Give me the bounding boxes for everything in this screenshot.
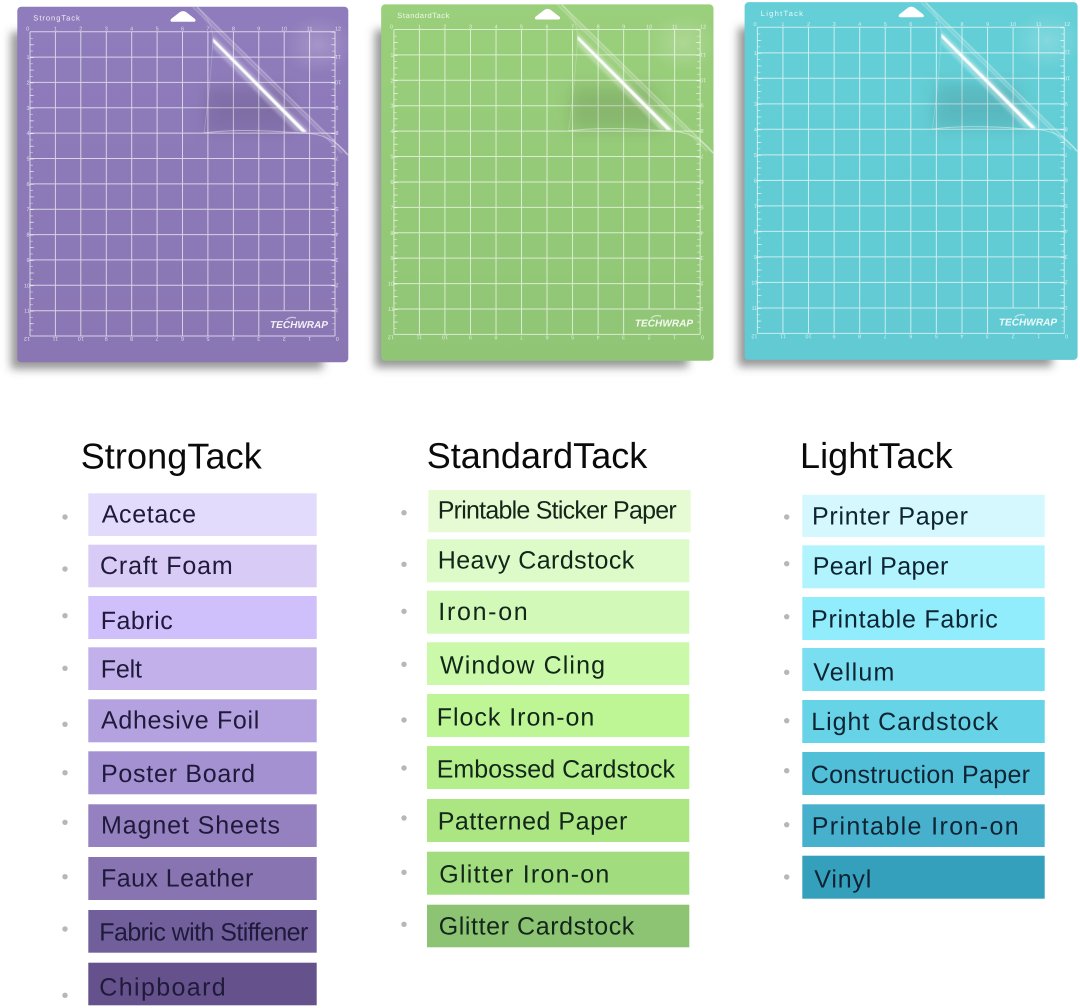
ruler numbers: 123456789 bbox=[1065, 100, 1068, 310]
peeled protective film bbox=[558, 5, 719, 153]
mat board bbox=[381, 4, 713, 361]
panel: StrongTack materials bbox=[62, 435, 317, 1005]
panel: LightTack materials bbox=[784, 435, 1045, 899]
item: Pearl Paper: Pearl Paper bbox=[813, 553, 948, 581]
ruler numbers: 0123456789 bbox=[26, 26, 260, 32]
ruler numbers: 11 bbox=[335, 53, 341, 59]
item: Chipboard bbox=[62, 963, 317, 1005]
item: Chipboard: Chipboard bbox=[99, 974, 226, 1002]
ruler numbers: 10 bbox=[1064, 74, 1070, 80]
item: Heavy Cardstock: Heavy Cardstock bbox=[438, 547, 635, 575]
peeled protective film bbox=[193, 7, 354, 155]
mat shadow bbox=[375, 30, 688, 367]
item: Magnet Sheets bbox=[62, 804, 317, 847]
mat board bbox=[17, 7, 348, 362]
item: Printable Fabric bbox=[784, 597, 1045, 640]
icon: hanging hole bbox=[535, 9, 560, 19]
ruler numbers: 123456789 bbox=[754, 51, 757, 261]
ruler numbers: 11 bbox=[388, 307, 394, 313]
item: Embossed Cardstock: Embossed Cardstock bbox=[437, 755, 676, 783]
icon: hanging hole bbox=[899, 7, 924, 17]
mat label: LightTack bbox=[761, 9, 803, 18]
ruler numbers: 10 bbox=[646, 24, 652, 30]
item: Patterned Paper bbox=[401, 799, 689, 842]
ruler numbers: 10 bbox=[805, 333, 812, 339]
item: Adhesive Foil bbox=[62, 699, 317, 742]
ruler numbers: 11 bbox=[1064, 49, 1070, 55]
ruler numbers: 11 bbox=[700, 51, 706, 57]
ruler numbers: 12 bbox=[1064, 22, 1070, 28]
item: Glitter Cardstock: Glitter Cardstock bbox=[439, 912, 635, 940]
item: Iron-on bbox=[401, 591, 689, 634]
item: Adhesive Foil: Adhesive Foil bbox=[101, 707, 259, 735]
ruler numbers: 10 bbox=[388, 282, 394, 288]
item: Vellum: Vellum bbox=[813, 659, 894, 687]
ruler numbers: 12 bbox=[335, 26, 341, 32]
item: Printable Fabric: Printable Fabric bbox=[811, 605, 998, 633]
mat shadow bbox=[11, 32, 323, 369]
ruler numbers: 11 bbox=[780, 333, 786, 339]
logo: TECHWRAP bbox=[999, 317, 1057, 328]
logo: TECHWRAP bbox=[635, 318, 693, 329]
ruler numbers: 10 bbox=[442, 334, 448, 340]
item: Craft Foam bbox=[62, 545, 317, 587]
item: Iron-on: Iron-on bbox=[438, 598, 528, 626]
item: Patterned Paper: Patterned Paper bbox=[438, 807, 627, 835]
item: Window Cling bbox=[401, 642, 689, 685]
ruler numbers: 123456789 bbox=[390, 53, 393, 262]
item: Magnet Sheets: Magnet Sheets bbox=[101, 811, 280, 839]
ruler numbers: 11 bbox=[417, 334, 422, 340]
ruler numbers: 10 bbox=[78, 335, 84, 341]
item: Embossed Cardstock bbox=[401, 746, 689, 789]
mat label: StandardTack bbox=[397, 11, 450, 20]
ruler numbers: 10 bbox=[24, 283, 30, 289]
item: Glitter Iron-on bbox=[401, 852, 689, 895]
item: Heavy Cardstock bbox=[401, 539, 689, 582]
peeled protective film bbox=[921, 2, 1080, 151]
panel: StrongTack mat bbox=[11, 7, 354, 369]
heading: LightTack: LightTack bbox=[800, 435, 954, 476]
item: Printable Sticker Paper bbox=[401, 490, 691, 532]
ruler numbers: 12 bbox=[751, 333, 757, 339]
item: Printable Sticker Paper: Printable Sticker Paper bbox=[438, 496, 677, 524]
ruler numbers: 10 bbox=[751, 280, 757, 286]
item: Window Cling: Window Cling bbox=[440, 651, 605, 679]
item: Fabric with Stiffener bbox=[62, 910, 317, 953]
item: Vellum bbox=[784, 648, 1045, 691]
item: Printable Iron-on: Printable Iron-on bbox=[812, 812, 1019, 840]
logo: TECHWRAP bbox=[270, 320, 328, 331]
ruler numbers: 123456789 bbox=[701, 102, 704, 311]
ruler numbers: 0123456789 bbox=[832, 333, 1068, 339]
mat label: StrongTack bbox=[33, 14, 80, 22]
ruler numbers: 12 bbox=[24, 335, 30, 341]
ruler numbers: 123456789 bbox=[26, 55, 30, 264]
mat board bbox=[745, 2, 1078, 360]
ruler numbers: 10 bbox=[1010, 22, 1016, 28]
item: Faux Leather bbox=[62, 857, 317, 900]
ruler numbers bbox=[24, 26, 341, 341]
ruler numbers: 11 bbox=[53, 335, 58, 341]
item: Printer Paper bbox=[784, 495, 1045, 537]
item: Vinyl bbox=[784, 856, 1045, 899]
item: Faux Leather: Faux Leather bbox=[101, 865, 253, 893]
heading: StandardTack: StandardTack bbox=[427, 435, 648, 476]
ruler numbers: 0123456789 bbox=[469, 334, 704, 340]
cutting grid bbox=[394, 29, 700, 334]
item: Flock Iron-on: Flock Iron-on bbox=[437, 704, 594, 732]
item: Vinyl: Vinyl bbox=[814, 866, 871, 894]
ruler numbers: 123456789 bbox=[335, 104, 339, 313]
ruler numbers: 12 bbox=[700, 24, 706, 30]
item: Felt: Felt bbox=[101, 655, 142, 683]
ruler numbers bbox=[388, 24, 706, 340]
item: Glitter Iron-on: Glitter Iron-on bbox=[439, 860, 609, 888]
item: Light Cardstock: Light Cardstock bbox=[811, 708, 999, 736]
item: Fabric: Fabric bbox=[101, 607, 173, 635]
item: Printer Paper: Printer Paper bbox=[812, 502, 968, 530]
ruler numbers bbox=[751, 22, 1070, 339]
ruler numbers: 11 bbox=[751, 306, 757, 312]
item: Printable Iron-on bbox=[784, 804, 1045, 847]
item: Poster Board bbox=[62, 751, 317, 794]
item: Fabric bbox=[62, 596, 317, 639]
ruler numbers: 10 bbox=[281, 26, 287, 32]
ruler numbers: 10 bbox=[700, 76, 706, 82]
ruler numbers: 0123456789 bbox=[105, 335, 339, 341]
icon: hanging hole bbox=[170, 11, 196, 22]
item: Acetace: Acetace bbox=[102, 501, 196, 529]
item: Flock Iron-on bbox=[401, 694, 689, 737]
mat shadow bbox=[738, 28, 1052, 367]
item: Construction Paper bbox=[784, 752, 1045, 795]
panel: LightTack mat bbox=[738, 2, 1080, 367]
heading: StrongTack: StrongTack bbox=[81, 435, 263, 476]
item: Fabric with Stiffener: Fabric with Stiffener bbox=[99, 919, 308, 947]
item: Construction Paper: Construction Paper bbox=[811, 761, 1030, 789]
item: Felt bbox=[62, 647, 317, 690]
cutting grid bbox=[757, 27, 1064, 333]
ruler numbers: 10 bbox=[335, 78, 341, 84]
ruler numbers: 0123456789 bbox=[390, 24, 625, 30]
ruler numbers: 11 bbox=[672, 24, 678, 30]
item: Light Cardstock bbox=[784, 700, 1045, 743]
item: Pearl Paper bbox=[784, 545, 1045, 588]
cutting grid bbox=[30, 32, 335, 336]
ruler numbers: 11 bbox=[24, 309, 30, 315]
panel: StandardTack mat bbox=[375, 4, 719, 367]
panel: StandardTack materials bbox=[401, 435, 691, 947]
ruler numbers: 0123456789 bbox=[754, 22, 989, 28]
item: Glitter Cardstock bbox=[401, 905, 689, 947]
ruler numbers: 11 bbox=[307, 26, 312, 32]
ruler numbers: 11 bbox=[1036, 22, 1042, 28]
item: Craft Foam: Craft Foam bbox=[100, 552, 233, 580]
item: Poster Board: Poster Board bbox=[101, 760, 255, 788]
ruler numbers: 12 bbox=[388, 334, 394, 340]
item: Acetace bbox=[62, 493, 317, 536]
